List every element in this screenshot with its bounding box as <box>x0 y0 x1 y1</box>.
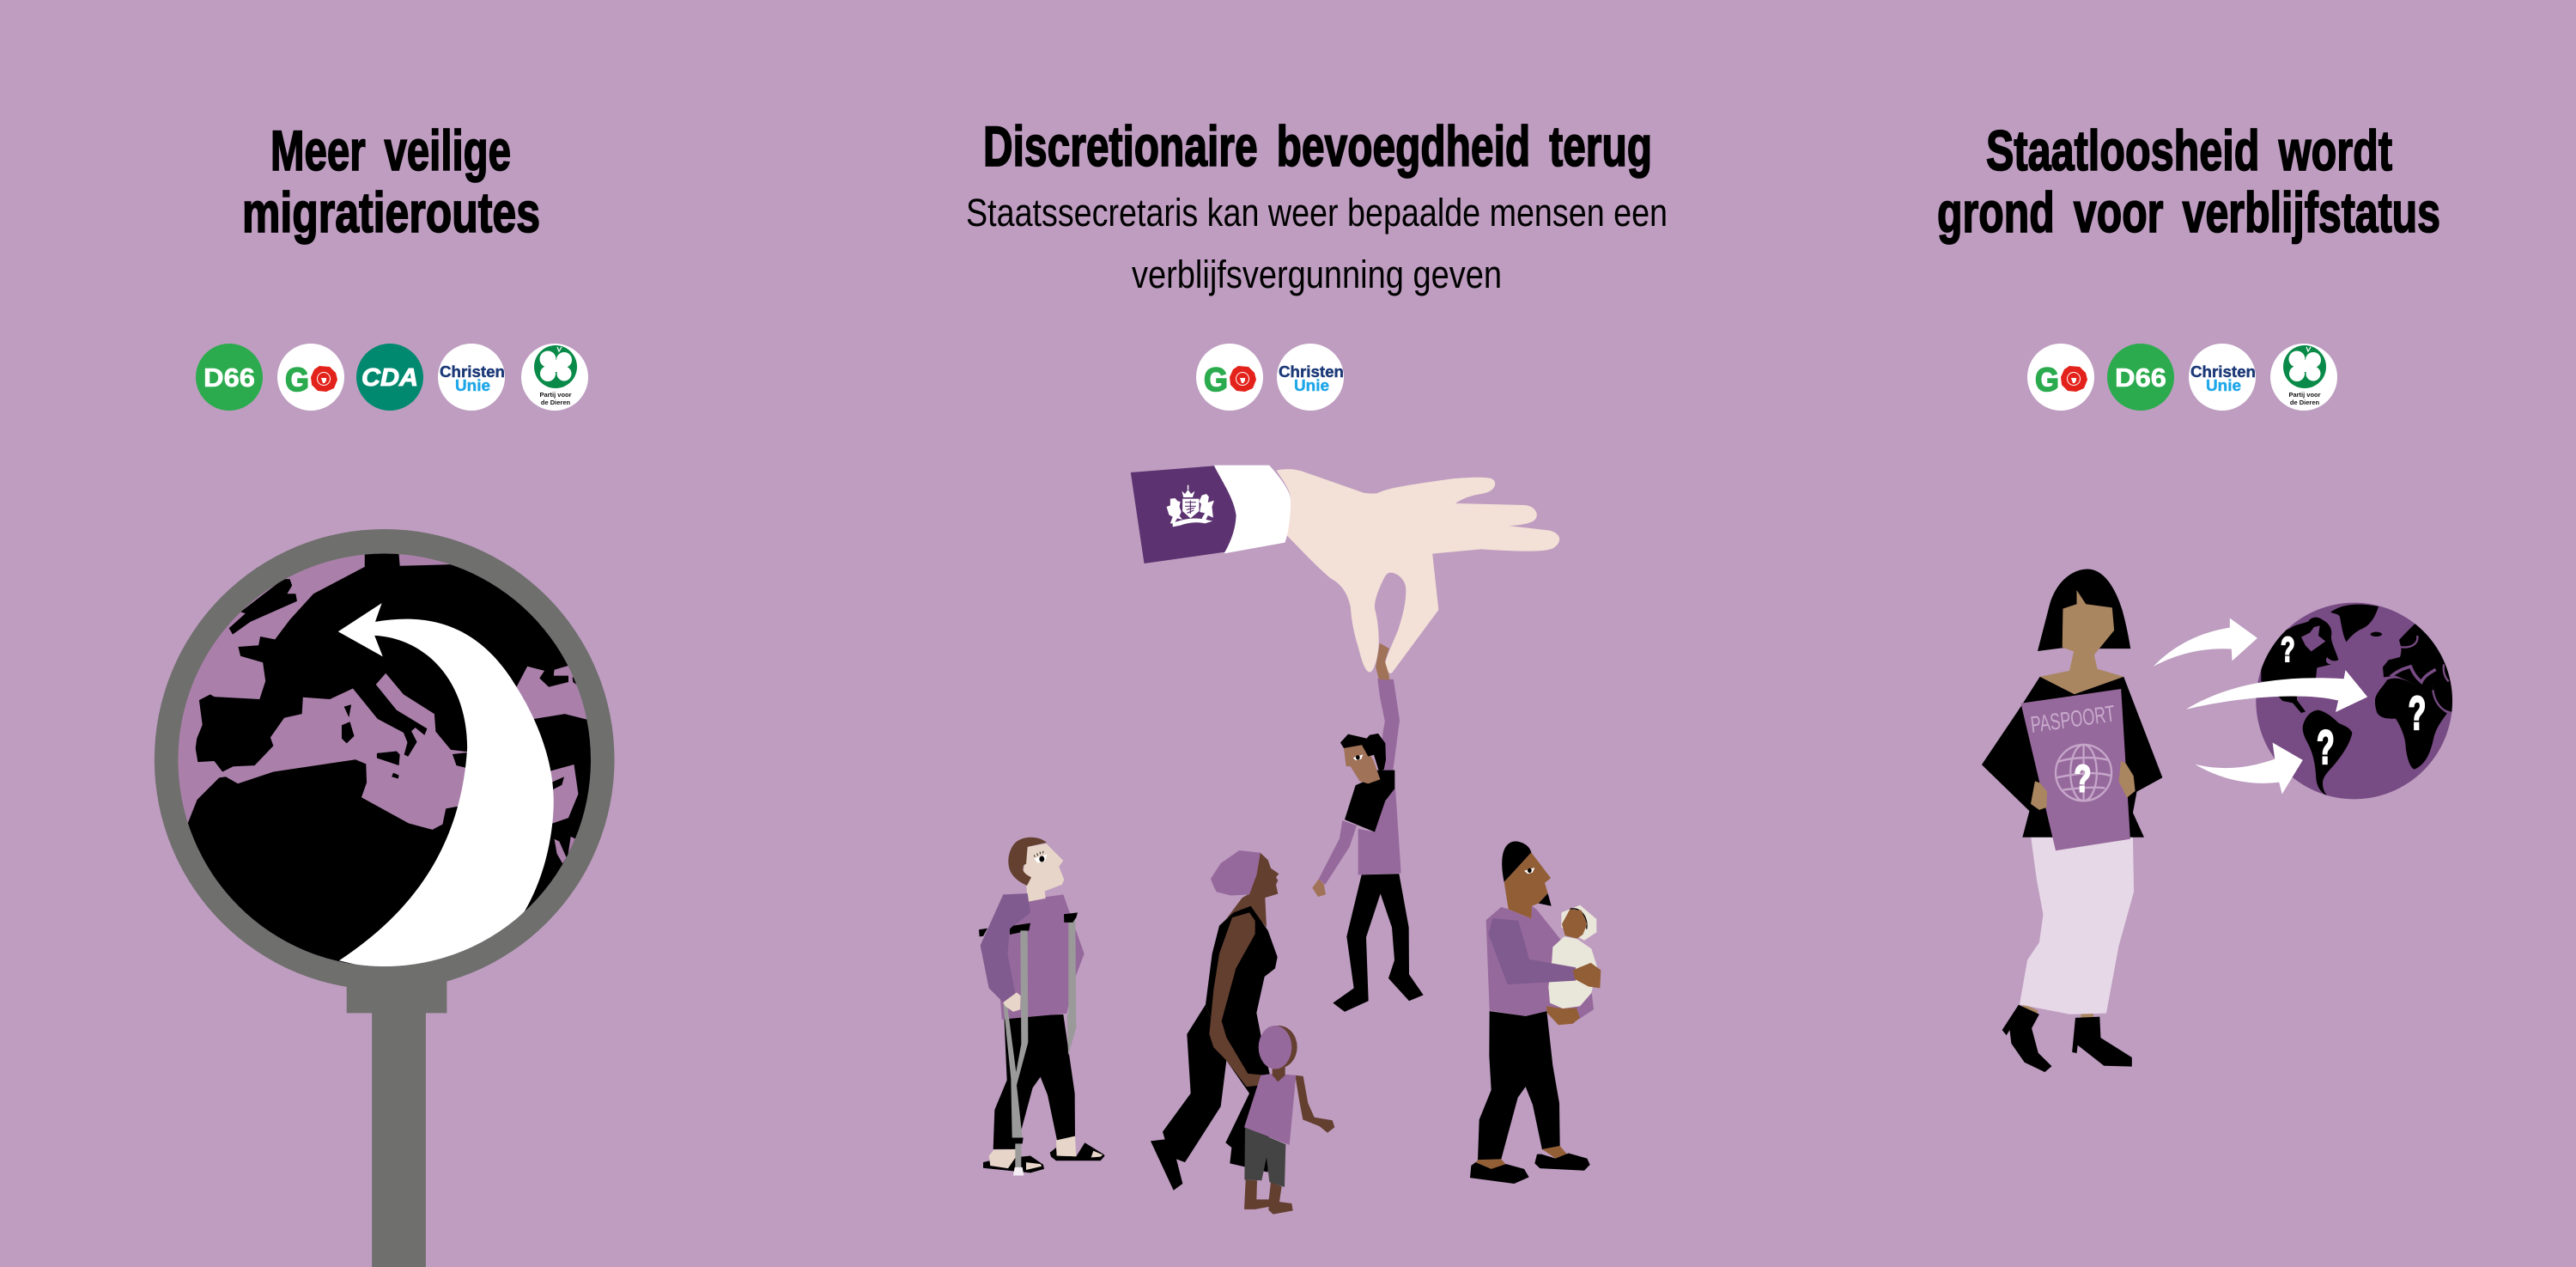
figure: man on crutches <box>979 838 1105 1175</box>
icon: globe with question marks: ? <box>2317 721 2335 774</box>
icon: globe with question marks <box>2256 603 2454 799</box>
pinched wrist <box>1376 643 1389 680</box>
panel: veilige migratieroutes <box>155 119 615 1267</box>
party logos row <box>1196 344 1344 411</box>
logo: ChristenUnie: Unie <box>1294 377 1329 394</box>
figure: child <box>1244 1026 1334 1215</box>
party logos row <box>196 344 588 411</box>
cuff <box>1214 466 1291 553</box>
sleeve with coat of arms <box>1131 466 1291 563</box>
figure: woman in black dress with headscarf <box>1151 850 1279 1191</box>
logo: Partij voor de Dieren: de Dieren <box>2290 399 2320 406</box>
heading: staatloosheid wordt grond voor verblijfstatus: Staatloosheid wordt <box>1986 119 2392 182</box>
icon: globe with question marks: ? <box>2281 630 2295 669</box>
logo: Partij voor de Dieren: de Dieren <box>541 399 571 406</box>
panel: discretionaire bevoegdheid <box>966 114 1668 1215</box>
icon: globe with question marks: ? <box>2409 687 2426 740</box>
logo: ChristenUnie: Christen <box>440 363 505 381</box>
party logos row <box>2027 344 2337 411</box>
map in lens <box>178 553 591 967</box>
logo: ChristenUnie: Christen <box>2190 363 2256 381</box>
logo: Partij voor de Dieren <box>2270 344 2337 411</box>
logo: GroenLinks-PvdA <box>1196 344 1263 411</box>
logo: GroenLinks-PvdA: G <box>285 362 309 399</box>
logo: D66 <box>196 344 263 411</box>
logo: Partij voor de Dieren: Partij voor <box>539 391 572 399</box>
heading: meer veilige migratieroutes: migratieroutes <box>242 180 540 244</box>
logo: Partij voor de Dieren: Partij voor <box>2288 391 2321 399</box>
logo: GroenLinks-PvdA <box>2027 344 2094 411</box>
logo: D66 <box>2107 344 2174 411</box>
logo: GroenLinks-PvdA: G <box>1204 362 1228 399</box>
figure: father with baby <box>1470 841 1601 1184</box>
logo: D66: D66 <box>2115 362 2166 393</box>
arrow: migration route <box>338 603 554 989</box>
heading: staatloosheid wordt grond voor verblijfstatus <box>1937 119 2440 244</box>
logo: GroenLinks-PvdA <box>277 344 344 411</box>
figure: woman holding passport <box>1982 569 2162 1072</box>
logo: GroenLinks-PvdA: G <box>2035 362 2059 399</box>
heading: meer veilige migratieroutes: Meer veilige <box>270 119 511 182</box>
logo: Partij voor de Dieren <box>521 344 588 411</box>
arrows towards the globe <box>2154 618 2367 794</box>
subheading text <box>966 191 1668 296</box>
heading: meer veilige migratieroutes <box>242 119 540 244</box>
panel: staatloosheid <box>1937 119 2454 1072</box>
raised arm sleeve <box>1377 679 1400 771</box>
figure: woman lifted by the arm <box>1312 734 1424 1012</box>
logo: ChristenUnie <box>1277 344 1344 411</box>
logo: D66: D66 <box>204 362 255 393</box>
logo: CDA: CDA <box>361 364 418 392</box>
icon: magnifier with map of the Mediterranean <box>155 529 615 1267</box>
subheading text: Staatssecretaris kan weer bepaalde mensen een <box>966 191 1668 235</box>
logo: ChristenUnie <box>2189 344 2256 411</box>
passport: PASPOORT <box>2029 700 2117 738</box>
heading: discretionaire bevoegdheid terug: Discretionaire bevoegdheid terug <box>983 114 1652 178</box>
passport: ? <box>2074 758 2091 801</box>
magnifier stick <box>347 969 447 1267</box>
logo: ChristenUnie: Christen <box>1279 363 1344 381</box>
logo: ChristenUnie <box>438 344 505 411</box>
logo: ChristenUnie: Unie <box>2206 377 2241 394</box>
illustration: hand of the state picking up a woman <box>1131 466 1559 771</box>
logo: CDA <box>356 344 423 411</box>
passport <box>2020 689 2130 850</box>
magnifier frame <box>155 529 615 990</box>
logo: ChristenUnie: Unie <box>455 377 490 394</box>
coat of arms <box>1167 485 1214 527</box>
hand <box>1276 469 1559 673</box>
subheading text: verblijfsvergunning geven <box>1132 253 1502 296</box>
